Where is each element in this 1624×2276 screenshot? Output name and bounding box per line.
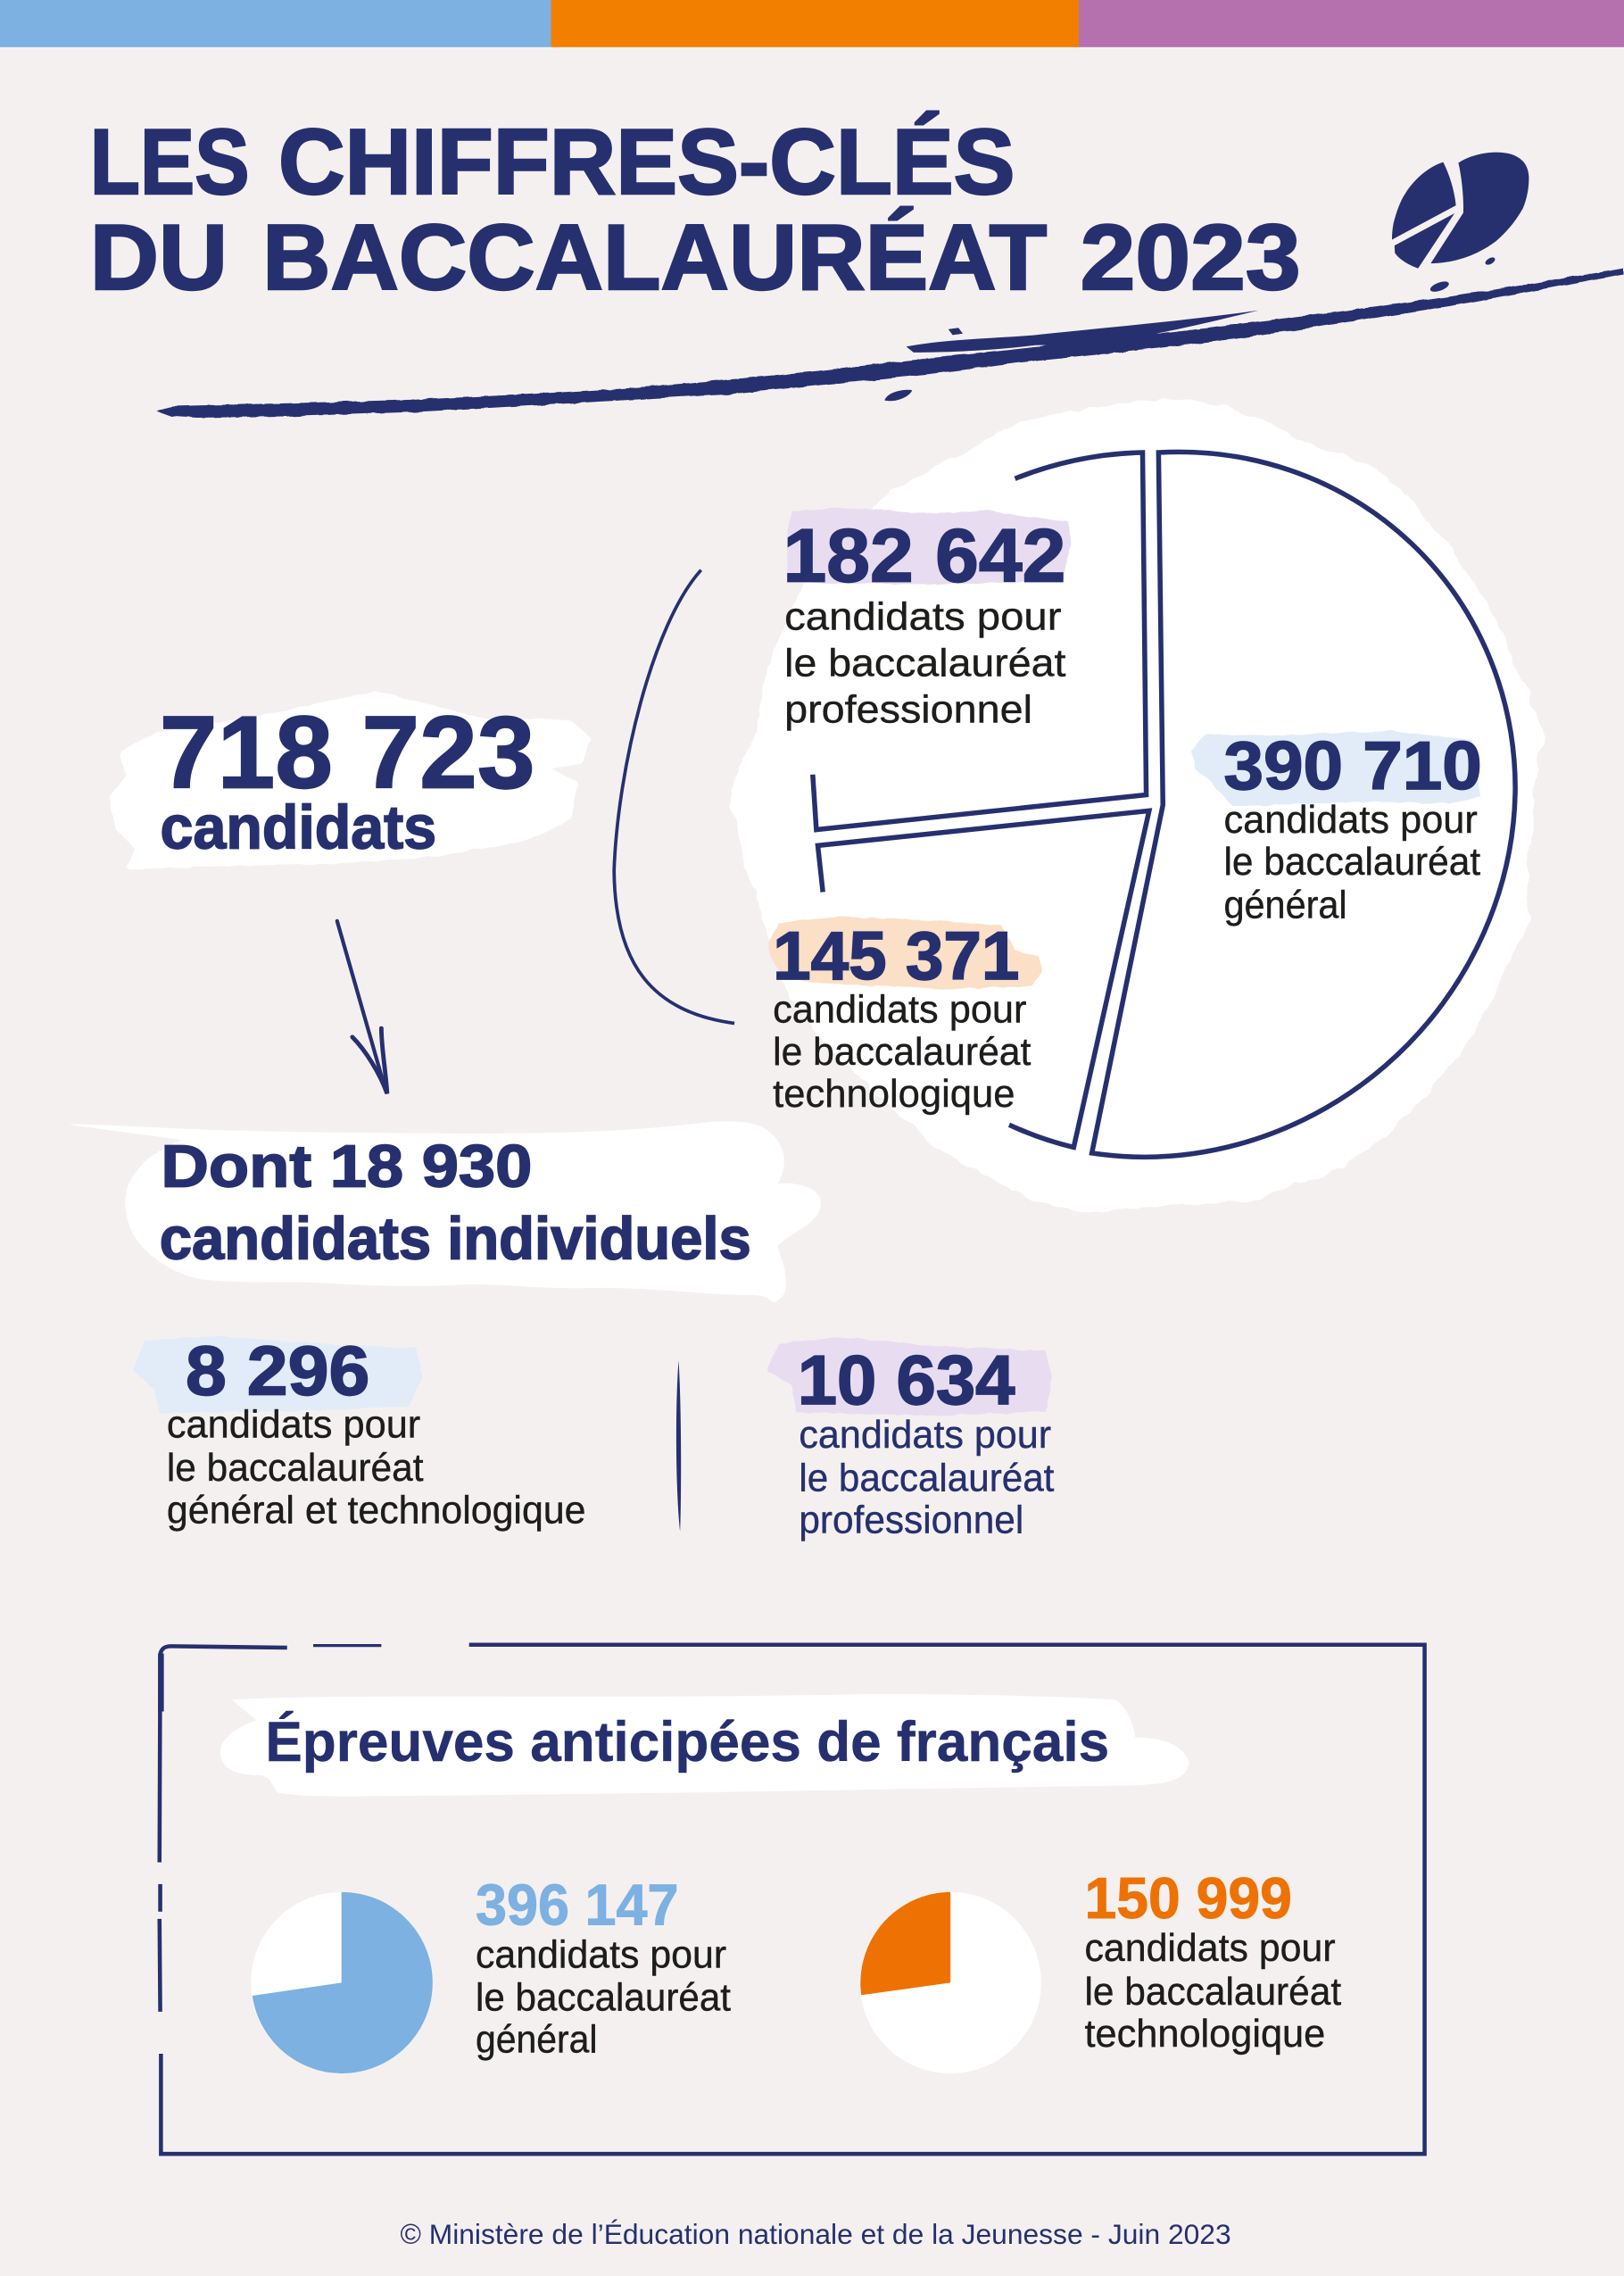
highlight — [134, 1336, 422, 1413]
brush highlight — [68, 1121, 821, 1302]
stat: 150 999: 150 999 — [1085, 1865, 1292, 1931]
stat: 145 371 technological: 145 371 — [773, 918, 1019, 994]
pie chart: technological track — [860, 1892, 1041, 2073]
section heading: Épreuves anticipées de français — [265, 1711, 1109, 1773]
brush highlight — [113, 694, 587, 866]
stat: 150 999: technologique — [1085, 2012, 1325, 2056]
title: BACCALAURÉAT — [262, 206, 1047, 310]
highlight — [768, 917, 1042, 989]
stat: 390 710 general: le baccalauréat — [1223, 840, 1480, 884]
stat: 8 296 general and technological: le baccalauréat — [167, 1446, 423, 1490]
pie chart: general track — [251, 1892, 433, 2073]
title: 2023 — [1081, 206, 1301, 310]
stat: 150 999 — [1085, 1865, 1341, 2056]
arrow down to individual candidates — [337, 921, 387, 1093]
white brush blob behind large pie — [733, 401, 1541, 1211]
stat: 182 642 professional: professionnel — [784, 687, 1032, 731]
panel: épreuves anticipées de français — [160, 1645, 1425, 2154]
panel: 718 723 candidates: candidats — [161, 794, 436, 862]
title brush stroke — [155, 269, 1624, 418]
top colour band — [0, 0, 1624, 47]
stat: 10 634 professional: professionnel — [799, 1499, 1023, 1542]
highlight — [787, 508, 1072, 585]
stat: 396 147: candidats pour — [476, 1932, 726, 1976]
stat: 8 296 general and technological: candidats pour — [167, 1402, 420, 1446]
footer credit: © Ministère de l’Éducation nationale et de la Jeunesse - Juin 2023 — [400, 2218, 1231, 2250]
stat: 396 147: général — [476, 2017, 598, 2061]
title: CHIFFRES-CLÉS — [278, 111, 1015, 214]
stat: 150 999: candidats pour — [1085, 1926, 1336, 1970]
stat: 182 642 professional — [783, 508, 1072, 731]
stat: 396 147: 396 147 — [476, 1872, 679, 1937]
panel: 18 930 individual candidates: Dont 18 930 — [161, 1134, 532, 1200]
stat: 390 710 general: candidats pour — [1223, 798, 1478, 842]
stat: 8 296 general and technological: 8 296 — [186, 1331, 369, 1409]
stat: 145 371 technological: technologique — [773, 1072, 1015, 1116]
title: DU — [90, 206, 228, 310]
stat: 150 999: le baccalauréat — [1085, 1970, 1341, 2014]
panel frame — [160, 1645, 1425, 2154]
stat: 145 371 technological — [768, 917, 1042, 1116]
stat: 10 634 professional: 10 634 — [798, 1341, 1015, 1419]
highlight — [767, 1337, 1053, 1416]
stat: 182 642 professional: candidats pour — [784, 594, 1062, 638]
stat: 8 296 general and technological: général et technologique — [167, 1488, 585, 1532]
stat: 390 710 general: 390 710 — [1223, 728, 1482, 804]
chart: large pie of candidates by track — [813, 452, 1515, 1157]
panel: 718 723 candidates — [113, 694, 587, 866]
stat: 8 296 general and technological — [134, 1331, 585, 1532]
title: LES — [90, 111, 250, 214]
panel: 18 930 individual candidates — [68, 1121, 821, 1302]
stat: 10 634 professional: candidats pour — [799, 1413, 1051, 1457]
title — [90, 111, 1301, 310]
stat: 390 710 general — [1192, 728, 1482, 927]
icon: pie chart — [1392, 153, 1529, 294]
panel: 18 930 individual candidates: candidats individuels — [160, 1207, 751, 1273]
stat: 10 634 professional: le baccalauréat — [799, 1457, 1054, 1500]
bracket linking total to pie — [614, 570, 734, 1023]
stat: 10 634 professional — [767, 1337, 1054, 1542]
stat: 396 147 — [476, 1872, 731, 2061]
stat: 182 642 professional: le baccalauréat — [784, 641, 1065, 685]
divider stroke between individual stats — [676, 1360, 681, 1532]
section heading — [220, 1694, 1189, 1797]
panel: 718 723 candidates: 718 723 — [160, 695, 535, 810]
stat: 145 371 technological: candidats pour — [773, 988, 1026, 1032]
stat: 396 147: le baccalauréat — [476, 1975, 731, 2019]
stat: 145 371 technological: le baccalauréat — [773, 1030, 1031, 1074]
stat: 390 710 general: général — [1223, 884, 1347, 927]
highlight — [1192, 731, 1480, 807]
stat: 182 642 professional: 182 642 — [783, 514, 1065, 598]
